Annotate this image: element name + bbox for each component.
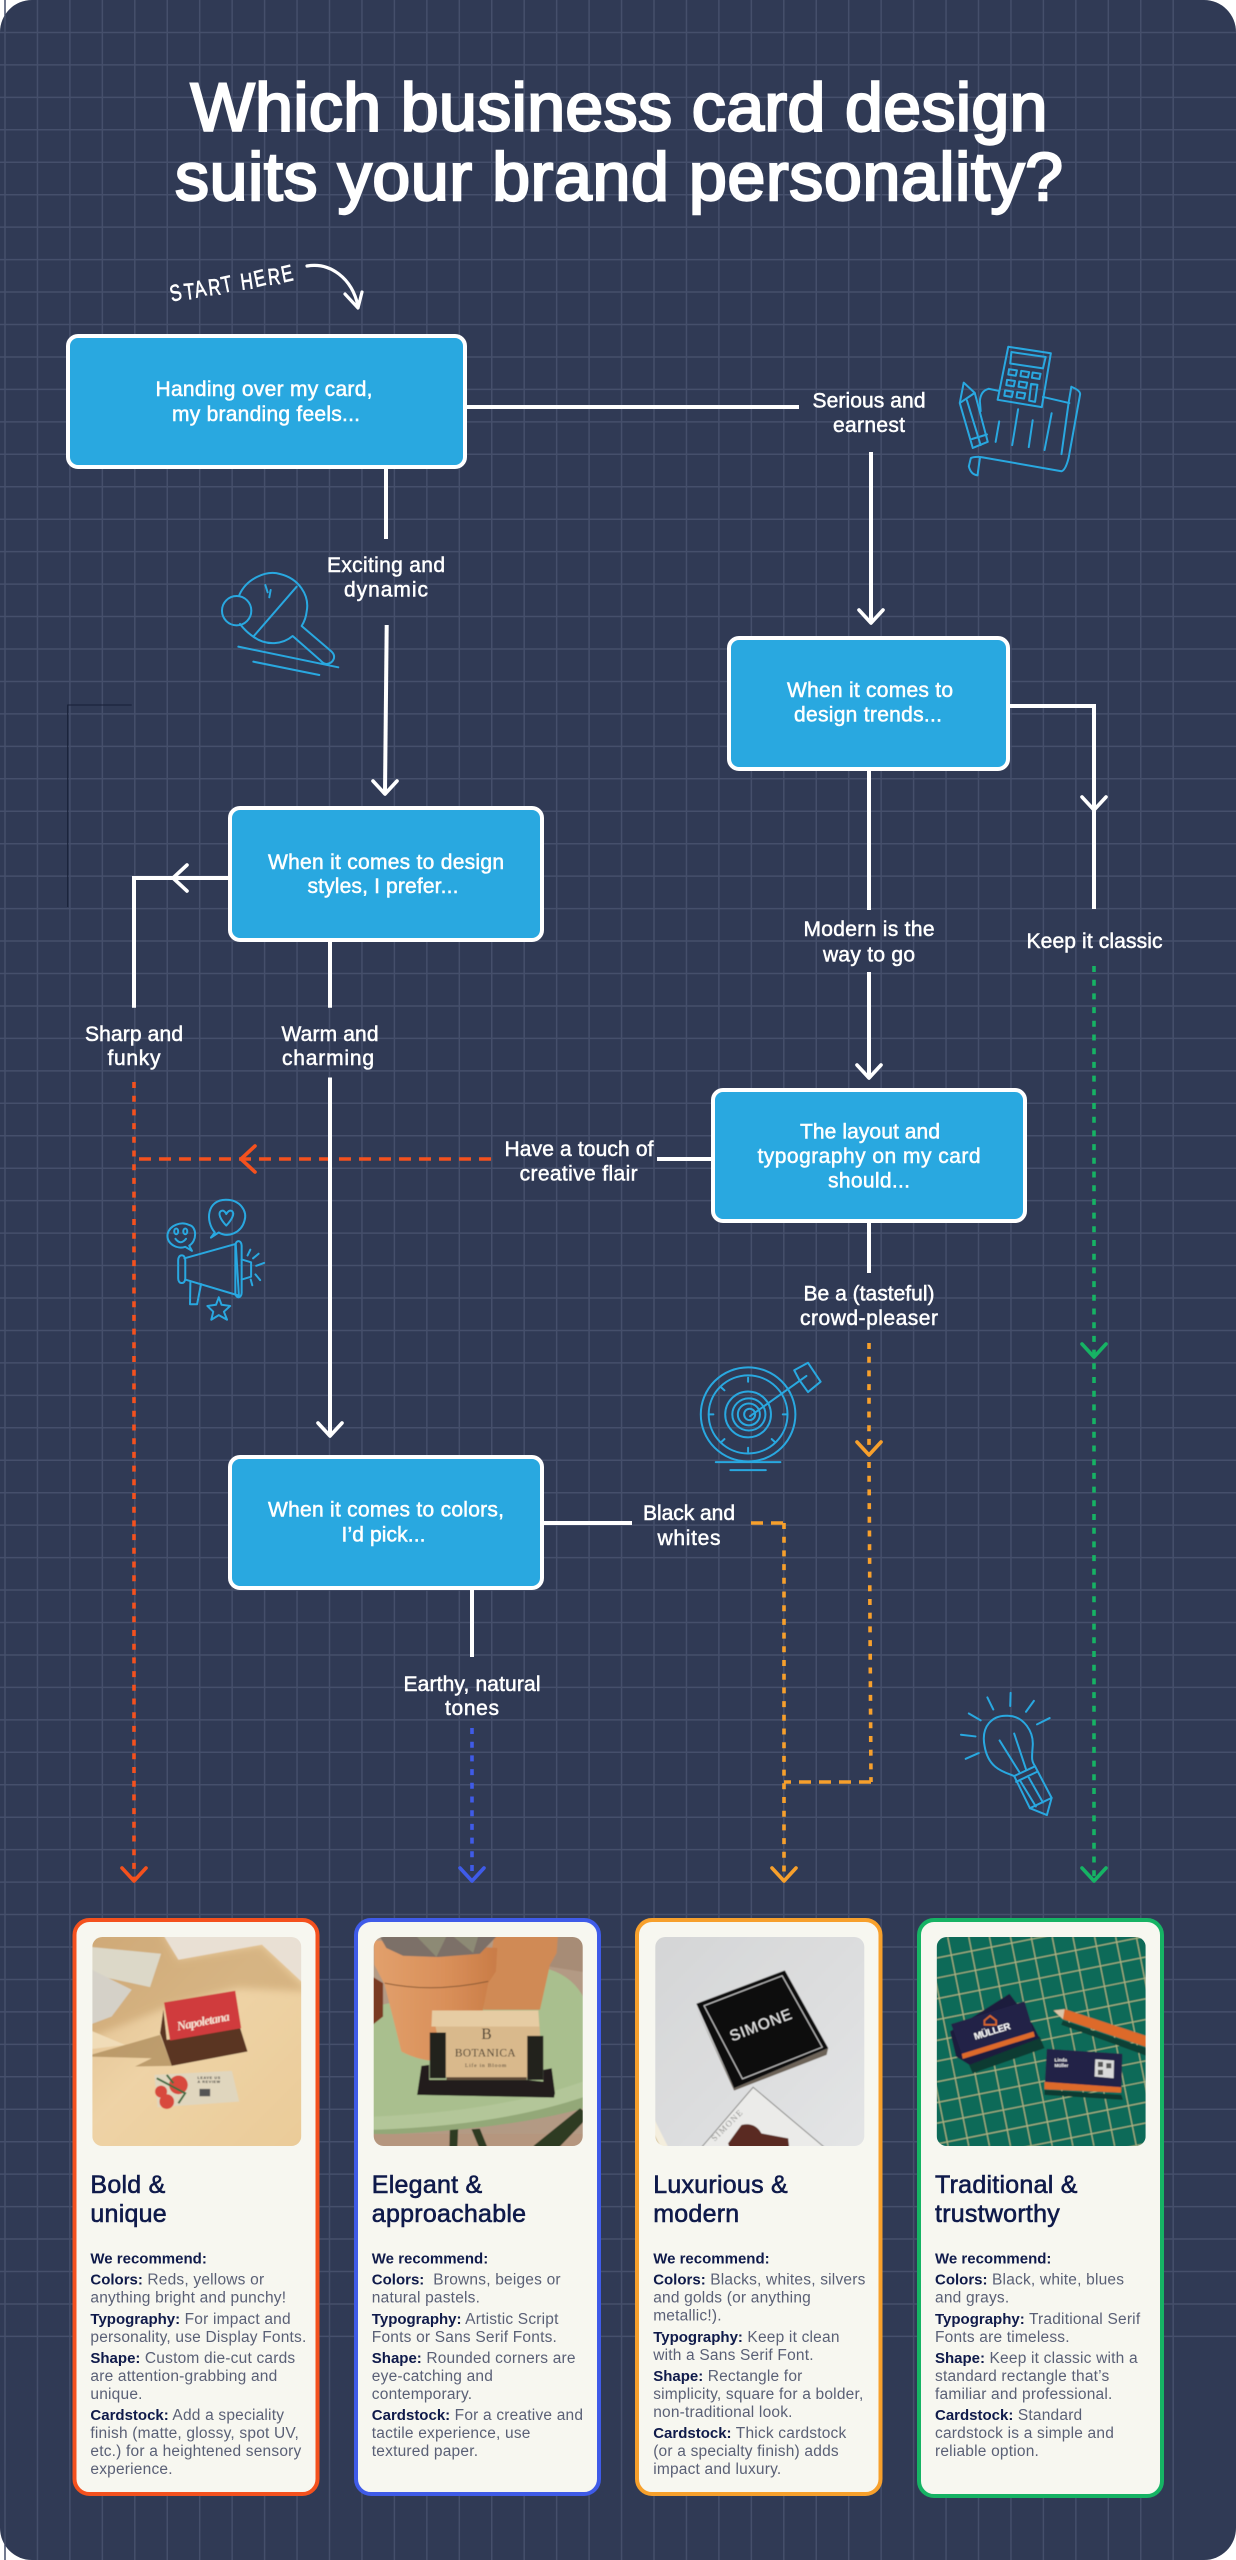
arrow: to layout question — [857, 972, 881, 1078]
question box: design trends: design trends... — [794, 704, 942, 726]
card recommendations: We recommend: — [372, 2251, 488, 2268]
photo: Simone black square card: SIMONE — [709, 2108, 744, 2143]
card recommendations: tactile experience, use — [372, 2425, 531, 2442]
card recommendations: Typography: Artistic Script — [372, 2311, 559, 2328]
panel: traditional and trustworthy — [906, 1916, 1178, 2496]
start here annotation — [167, 260, 362, 309]
start here annotation: START HERE — [167, 260, 295, 309]
card recommendations: with a Sans Serif Font. — [652, 2347, 814, 2364]
card title — [372, 2171, 526, 2228]
question box: layout and typography: The layout and — [800, 1120, 940, 1144]
card title — [90, 2171, 167, 2228]
card title: trustworthy — [935, 2200, 1060, 2228]
photo: Botanica card with terracotta pots: BOTANICA — [455, 2048, 516, 2060]
card recommendations: Cardstock: Add a speciality — [90, 2407, 284, 2424]
icon: lightbulb pencil — [961, 1693, 1052, 1815]
label: Sharp and funky: funky — [108, 1047, 161, 1070]
photo: Napoletana cards on wood — [92, 1937, 302, 2146]
card recommendations: textured paper. — [372, 2443, 478, 2460]
connector with arrow: design styles to sharp and funky — [134, 865, 228, 1008]
card title: unique — [90, 2200, 167, 2228]
card recommendations: Cardstock: For a creative and — [372, 2407, 583, 2424]
label: Serious and earnest: Serious and — [812, 390, 926, 412]
label: Have a touch of creative flair — [504, 1138, 654, 1186]
card recommendations: (or a specialty finish) adds — [653, 2443, 839, 2460]
question box: branding feel: my branding feels... — [172, 403, 360, 426]
connector with arrow: design trends to keep it classic — [1010, 706, 1106, 909]
dashed path: red to bold and unique — [122, 1082, 146, 1881]
label: Warm and charming — [282, 1023, 378, 1070]
connector: first question to exciting and dynamic — [384, 469, 388, 539]
connector: colors question to earthy tones — [470, 1590, 474, 1657]
dashed path: orange from black and whites to luxurious — [751, 1523, 796, 1881]
label: Exciting and dynamic — [327, 554, 445, 602]
card recommendations: Shape: Custom die-cut cards — [90, 2350, 295, 2367]
photo: Napoletana cards on wood: LEAVE US — [197, 2076, 221, 2080]
card recommendations: Colors: Reds, yellows or — [90, 2272, 264, 2289]
label: Black and whites — [643, 1502, 735, 1550]
label: Warm and charming: charming — [282, 1047, 374, 1070]
card title: Luxurious & — [653, 2171, 788, 2199]
card recommendations: Typography: For impact and — [90, 2311, 291, 2328]
dashed path with arrow: creative flair to red path — [134, 1146, 491, 1172]
label: Earthy, natural tones: tones — [445, 1697, 499, 1720]
arrow: warm and charming to colors question — [318, 1078, 342, 1436]
label: Sharp and funky: Sharp and — [85, 1023, 183, 1046]
dashed path: blue to elegant — [460, 1728, 484, 1881]
label: Keep it classic: Keep it classic — [1026, 930, 1162, 953]
card recommendations: Fonts are timeless. — [935, 2329, 1070, 2346]
photo: Simone black square card — [655, 1937, 864, 2146]
question box: layout and typography: should... — [828, 1170, 910, 1192]
connector: design trends to modern — [867, 771, 871, 910]
question box: branding feel: Handing over my card, — [156, 378, 372, 401]
card recommendations: finish (matte, glossy, spot UV, — [90, 2425, 299, 2442]
connector: design styles to warm and charming — [328, 942, 332, 1008]
card recommendations: cardstock is a simple and — [935, 2425, 1114, 2442]
label: Earthy, natural tones: Earthy, natural — [404, 1673, 540, 1696]
question box: design trends — [729, 638, 1008, 769]
photo: Simone black square card: SIMONE — [727, 2006, 794, 2045]
label: Serious and earnest: earnest — [833, 414, 905, 437]
card recommendations: anything bright and punchy! — [90, 2290, 286, 2307]
card recommendations: We recommend: — [935, 2251, 1051, 2268]
card recommendations: Shape: Rectangle for — [653, 2368, 803, 2385]
icon: dartboard target — [701, 1363, 821, 1470]
card recommendations — [935, 2251, 1141, 2460]
card recommendations: Cardstock: Thick cardstock — [653, 2425, 847, 2442]
card recommendations — [90, 2251, 307, 2478]
panel: elegant and approachable — [356, 1920, 599, 2494]
label: Be a (tasteful) crowd-pleaser: Be a (tasteful) — [804, 1282, 934, 1306]
card recommendations: reliable option. — [935, 2443, 1039, 2460]
photo: Napoletana cards on wood: Napoletana — [175, 2009, 231, 2034]
card recommendations: We recommend: — [90, 2251, 207, 2268]
card recommendations: Typography: Traditional Serif — [935, 2311, 1141, 2328]
card recommendations: and golds (or anything — [653, 2290, 811, 2307]
question box: layout and typography — [713, 1090, 1025, 1221]
arrow: to design styles question — [373, 625, 397, 794]
card recommendations — [652, 2251, 866, 2478]
card recommendations: etc.) for a heightened sensory — [90, 2443, 302, 2460]
card recommendations: eye-catching and — [372, 2368, 493, 2385]
card recommendations: Cardstock: Standard — [935, 2407, 1082, 2424]
card title: Bold & — [90, 2171, 166, 2199]
label: Serious and earnest — [812, 390, 926, 437]
title: Which business card design — [190, 70, 1048, 146]
title: suits your brand personality? — [175, 139, 1063, 215]
photo: Botanica card with terracotta pots — [374, 1937, 583, 2146]
label: Modern is the way to go: way to go — [822, 944, 915, 967]
card recommendations: Fonts or Sans Serif Fonts. — [372, 2329, 557, 2346]
card recommendations: are attention-grabbing and — [90, 2368, 277, 2385]
card recommendations: simplicity, square for a bolder, — [653, 2386, 863, 2403]
question box: design styles: When it comes to design — [268, 851, 504, 874]
card title: approachable — [372, 2200, 526, 2228]
photo: Napoletana cards on wood: A REVIEW — [197, 2080, 221, 2084]
label: Be a (tasteful) crowd-pleaser — [800, 1282, 938, 1330]
panel: bold and unique — [74, 1920, 318, 2494]
card recommendations — [372, 2251, 583, 2460]
label: Exciting and dynamic: Exciting and — [327, 554, 445, 577]
label: Black and whites: Black and — [643, 1502, 735, 1525]
card title: Elegant & — [372, 2171, 483, 2199]
card recommendations: Shape: Rounded corners are — [372, 2350, 576, 2367]
question box: colors — [230, 1457, 542, 1588]
question box: design trends: When it comes to — [787, 679, 953, 702]
arrow: to design trends question — [859, 452, 883, 623]
icon: table tennis paddle — [222, 573, 338, 675]
question box: colors: I’d pick... — [342, 1524, 426, 1546]
card recommendations: contemporary. — [372, 2386, 472, 2403]
card recommendations: natural pastels. — [372, 2290, 480, 2307]
photo: Botanica card with terracotta pots: B — [481, 2026, 492, 2043]
photo: Müller cards on cutting mat: Linda — [1055, 2058, 1067, 2063]
label: Sharp and funky — [85, 1023, 183, 1070]
card recommendations: Colors: Browns, beiges or — [372, 2272, 561, 2289]
icon: calculator and blueprint — [960, 347, 1080, 475]
card recommendations: Colors: Blacks, whites, silvers — [653, 2272, 866, 2289]
card title: Traditional & — [935, 2171, 1078, 2199]
label: Warm and charming: Warm and — [282, 1023, 378, 1046]
panel: luxurious and modern — [637, 1920, 880, 2494]
question box: colors: When it comes to colors, — [268, 1498, 504, 1522]
label: Be a (tasteful) crowd-pleaser: crowd-pleaser — [800, 1307, 938, 1330]
label: Earthy, natural tones — [404, 1673, 540, 1720]
photo: Müller cards on cutting mat — [936, 1937, 1146, 2146]
question box: design styles — [230, 808, 542, 940]
connector: layout question to crowd-pleaser — [867, 1223, 871, 1273]
label: Black and whites: whites — [656, 1527, 720, 1550]
label: Have a touch of creative flair: creative flair — [520, 1162, 638, 1186]
label: Modern is the way to go — [804, 918, 934, 967]
connector: colors question to black and whites — [544, 1521, 632, 1525]
question box: branding feel — [68, 336, 465, 467]
card recommendations: and grays. — [935, 2290, 1009, 2307]
card title — [653, 2171, 788, 2228]
card recommendations: We recommend: — [653, 2251, 770, 2268]
card recommendations: Typography: Keep it clean — [653, 2329, 840, 2346]
photo: Botanica card with terracotta pots: Life in Bloom — [465, 2062, 507, 2069]
photo: Müller cards on cutting mat: Müller — [1055, 2063, 1068, 2068]
card title — [935, 2171, 1078, 2228]
dashed path: green to traditional — [1082, 966, 1106, 1881]
question box: layout and typography: typography on my card — [758, 1145, 980, 1168]
label: Have a touch of creative flair: Have a touch of — [504, 1138, 654, 1161]
dashed path: orange from crowd-pleaser to luxurious — [784, 1343, 881, 1782]
label: Modern is the way to go: Modern is the — [804, 918, 934, 941]
card recommendations: standard rectangle that’s — [935, 2368, 1110, 2385]
photo: Müller cards on cutting mat: MÜLLER — [973, 2021, 1012, 2043]
card recommendations: non-traditional look. — [653, 2404, 793, 2421]
card recommendations: Shape: Keep it classic with a — [935, 2350, 1138, 2367]
card recommendations: metallic!). — [653, 2308, 722, 2324]
question box: design styles: styles, I prefer... — [308, 875, 458, 898]
card recommendations: experience. — [90, 2461, 173, 2478]
label: Exciting and dynamic: dynamic — [344, 579, 428, 602]
card recommendations: Colors: Black, white, blues — [935, 2272, 1124, 2289]
card recommendations: impact and luxury. — [653, 2461, 781, 2478]
icon: megaphone — [167, 1200, 264, 1320]
title — [175, 70, 1063, 215]
card recommendations: personality, use Display Fonts. — [90, 2329, 307, 2346]
card recommendations: unique. — [90, 2386, 143, 2403]
card title: modern — [653, 2200, 739, 2228]
card recommendations: familiar and professional. — [935, 2386, 1113, 2403]
connector: layout question to creative flair — [657, 1157, 711, 1161]
connector: first question to serious and earnest — [467, 405, 799, 409]
